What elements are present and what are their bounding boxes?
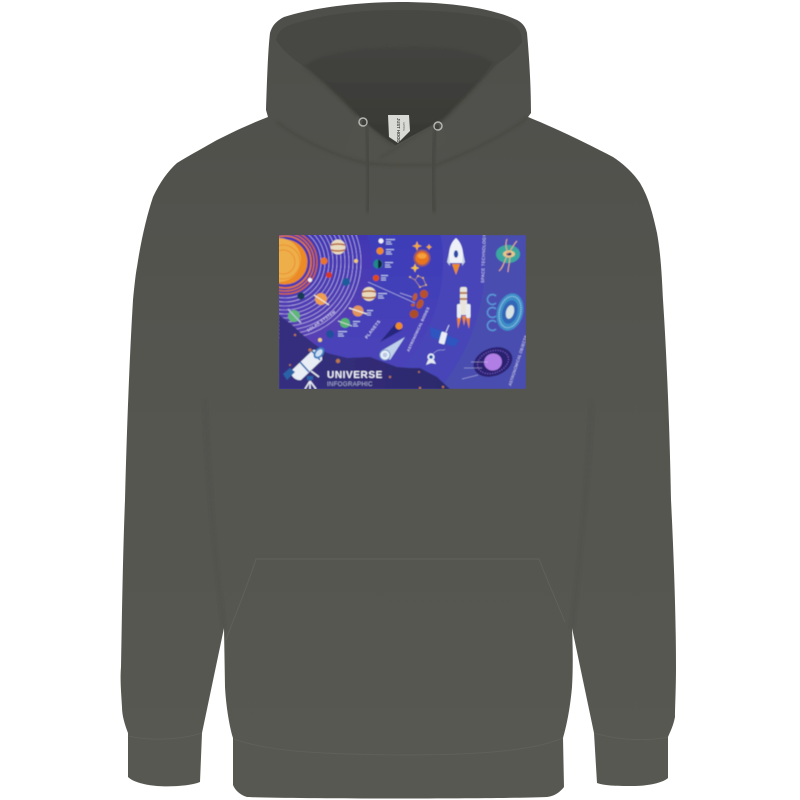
neck label tag: AWDis <box>402 122 406 132</box>
planet captions <box>338 239 395 336</box>
icon: white comet <box>380 337 405 360</box>
band: astronomical bodies <box>368 235 442 268</box>
hoodie body and sleeves silhouette <box>121 2 676 798</box>
icon: asteroids <box>400 290 428 318</box>
right eyelet <box>434 122 442 130</box>
band: solar system <box>279 254 371 344</box>
heading: solar system: SOLAR SYSTEM <box>306 310 337 333</box>
icon: satellite <box>430 325 459 347</box>
hill stars <box>289 334 444 389</box>
icon: black hole <box>496 239 520 272</box>
hood front edge shading <box>205 64 592 628</box>
icon: orange comet <box>380 322 403 342</box>
neck label tag: JUST HOODS <box>396 118 401 145</box>
hoodie garment <box>121 2 676 798</box>
title: UNIVERSE <box>327 370 383 381</box>
solar system orbits <box>279 235 362 338</box>
solar system planets <box>288 240 358 323</box>
left drawstring <box>366 126 369 212</box>
background hills <box>279 315 450 389</box>
heading: planets: PLANETS <box>364 319 382 340</box>
title <box>327 370 383 388</box>
title: INFOGRAPHIC <box>327 381 373 388</box>
icon: spiral galaxy <box>496 292 524 332</box>
icon: small rocket <box>447 238 465 275</box>
heading: space technology: SPACE TECHNOLOGY <box>480 234 487 283</box>
icon: nebula <box>462 346 513 380</box>
right drawstring <box>433 129 436 212</box>
printed universe infographic panel <box>279 235 526 389</box>
panel background <box>444 235 526 389</box>
hood inner lining <box>276 10 522 152</box>
hood inner shadow <box>305 47 493 152</box>
heading: astronomical objects: ASTRONOMICAL OBJECTS <box>508 335 528 386</box>
icon: small blue arcs <box>487 294 496 331</box>
icon: constellation <box>409 275 427 288</box>
kangaroo pocket <box>226 559 565 640</box>
icon: large rocket <box>457 287 470 329</box>
icon: sun <box>279 235 318 296</box>
icon: telescope <box>283 345 327 389</box>
band: astronomical objects boundary <box>378 235 484 389</box>
heading: astronomical bodies: ASTRONOMICAL BODIES <box>406 306 431 352</box>
neck label tag <box>388 115 410 145</box>
icon: astronaut <box>426 349 445 365</box>
planets column <box>318 238 415 342</box>
front neck fold <box>345 115 447 168</box>
left eyelet <box>359 118 367 126</box>
ribbed hem and cuff seams <box>128 733 668 755</box>
icon: stars and star <box>410 241 432 272</box>
